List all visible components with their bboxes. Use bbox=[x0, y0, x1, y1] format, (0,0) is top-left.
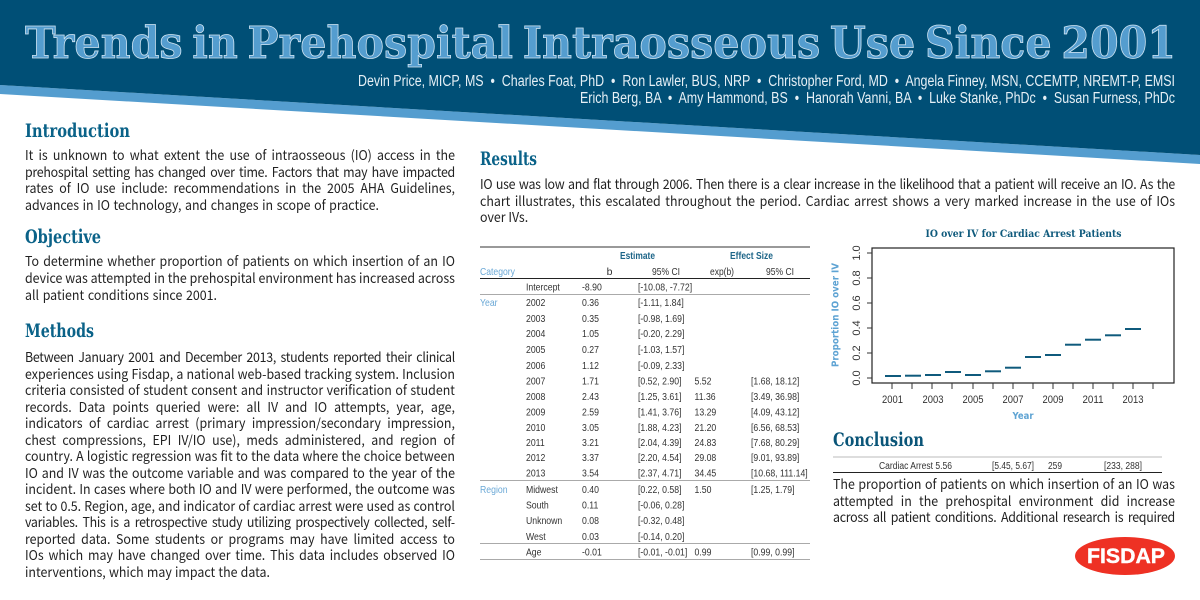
table effect size confidence intervals: [6.56, 68.53] bbox=[751, 422, 799, 434]
heading: results: Results bbox=[480, 148, 537, 170]
table estimate column: -0.01 bbox=[582, 547, 602, 559]
table effect size column: 29.08 bbox=[694, 452, 716, 464]
table estimate confidence intervals: [-0.98, 1.69] bbox=[638, 313, 684, 325]
table estimate confidence intervals: [-0.01, -0.01] bbox=[638, 547, 687, 559]
table row labels: 2012 bbox=[526, 452, 545, 464]
heading: introduction: Introduction bbox=[25, 120, 130, 142]
table estimate confidence intervals: [-0.14, 0.20] bbox=[638, 531, 684, 543]
table row labels: 2008 bbox=[526, 391, 545, 403]
table estimate confidence intervals: [-1.03, 1.57] bbox=[638, 344, 684, 356]
table category labels bbox=[480, 297, 508, 496]
table header: Category bbox=[480, 266, 516, 278]
table row labels: Age bbox=[526, 547, 541, 559]
table estimate column: 0.40 bbox=[582, 484, 599, 496]
table estimate confidence intervals: [1.25, 3.61] bbox=[638, 391, 682, 403]
text: results bbox=[480, 176, 1175, 225]
chart y axis labels bbox=[851, 245, 863, 386]
table estimate column: 3.37 bbox=[582, 452, 599, 464]
table estimate confidence intervals: [2.20, 4.54] bbox=[638, 452, 682, 464]
table row labels: 2002 bbox=[526, 297, 545, 309]
cardiac arrest table row: [233, 288] bbox=[1104, 461, 1142, 472]
table estimate column: 1.71 bbox=[582, 376, 599, 388]
chart x axis labels: 2005 bbox=[962, 394, 984, 406]
heading: conclusion: Conclusion bbox=[833, 429, 924, 451]
table effect size confidence intervals: [7.68, 80.29] bbox=[751, 437, 799, 449]
table effect size column: 0.99 bbox=[694, 547, 711, 559]
table effect size column: 11.36 bbox=[694, 391, 716, 403]
text: introduction bbox=[25, 147, 455, 213]
authors bbox=[358, 73, 1175, 107]
table effect size column bbox=[694, 376, 716, 559]
table row labels: 2003 bbox=[526, 313, 545, 325]
table category labels: Year bbox=[480, 297, 498, 309]
table row labels: 2007 bbox=[526, 376, 545, 388]
table row labels: West bbox=[526, 531, 546, 543]
table estimate column: 0.08 bbox=[582, 515, 599, 527]
table row labels: Midwest bbox=[526, 484, 558, 496]
header banner bbox=[0, 0, 1200, 164]
table effect size column: 34.45 bbox=[694, 468, 716, 480]
chart y axis labels: 0.6 bbox=[851, 295, 863, 311]
table estimate confidence intervals: [-0.09, 2.33] bbox=[638, 360, 684, 372]
table effect size confidence intervals: [1.25, 1.79] bbox=[751, 484, 795, 496]
cardiac arrest table row: Cardiac Arrest 5.56 bbox=[879, 461, 952, 472]
table estimate column: 0.27 bbox=[582, 344, 599, 356]
chart x axis labels: 2011 bbox=[1082, 394, 1104, 406]
table row labels: Unknown bbox=[526, 515, 562, 527]
table effect size confidence intervals bbox=[751, 376, 808, 559]
chart x axis labels bbox=[882, 394, 1144, 406]
table effect size confidence intervals: [9.01, 93.89] bbox=[751, 452, 799, 464]
table estimate column: 0.36 bbox=[582, 297, 599, 309]
logo: Fisdap: FISDAP bbox=[1087, 545, 1165, 568]
table header: 95% CI bbox=[766, 266, 794, 278]
chart y axis labels: 0.2 bbox=[851, 345, 863, 361]
table estimate confidence intervals: [0.22, 0.58] bbox=[638, 484, 682, 496]
table effect size confidence intervals: [3.49, 36.98] bbox=[751, 391, 799, 403]
chart x axis labels: 2009 bbox=[1042, 394, 1064, 406]
table effect size column: 1.50 bbox=[694, 484, 711, 496]
table estimate column: -8.90 bbox=[582, 282, 602, 294]
cardiac arrest table row: 259 bbox=[1048, 461, 1062, 472]
chart x axis labels: 2001 bbox=[882, 394, 903, 406]
chart y axis labels: 1.0 bbox=[851, 245, 863, 261]
table estimate column: 0.35 bbox=[582, 313, 599, 325]
table estimate confidence intervals: [2.37, 4.71] bbox=[638, 468, 682, 480]
table row labels: 2013 bbox=[526, 468, 545, 480]
table header: Estimate bbox=[620, 250, 655, 262]
chart y axis labels: 0.8 bbox=[851, 270, 863, 286]
table estimate column: 1.12 bbox=[582, 360, 599, 372]
cardiac arrest table row: [5.45, 5.67] bbox=[992, 461, 1034, 472]
table effect size confidence intervals: [4.09, 43.12] bbox=[751, 407, 799, 419]
table row labels: 2010 bbox=[526, 422, 545, 434]
chart x axis labels: 2013 bbox=[1122, 394, 1144, 406]
heading: methods: Methods bbox=[25, 320, 94, 342]
table effect size confidence intervals: [10.68, 111.14] bbox=[751, 468, 808, 480]
table row labels: 2011 bbox=[526, 437, 545, 449]
table effect size column: 21.20 bbox=[694, 422, 716, 434]
table estimate column: 2.59 bbox=[582, 407, 599, 419]
table estimate confidence intervals: [-0.20, 2.29] bbox=[638, 328, 684, 340]
table header: Effect Size bbox=[730, 250, 773, 262]
chart y axis title: Proportion IO over IV bbox=[830, 262, 842, 367]
table row labels: Intercept bbox=[526, 282, 560, 294]
cardiac arrest table row bbox=[833, 457, 1162, 472]
table effect size confidence intervals: [1.68, 18.12] bbox=[751, 376, 799, 388]
chart x axis title: Year bbox=[1012, 411, 1034, 422]
heading: objective: Objective bbox=[25, 226, 101, 248]
table header: exp(b) bbox=[710, 266, 734, 278]
table row labels bbox=[526, 282, 562, 559]
table estimate column: 2.43 bbox=[582, 391, 599, 403]
table row labels: 2006 bbox=[526, 360, 545, 372]
chart title: IO over IV for Cardiac Arrest Patients bbox=[926, 228, 1122, 240]
chart y axis labels: 0.4 bbox=[851, 320, 863, 336]
table estimate column: 3.21 bbox=[582, 437, 599, 449]
table estimate confidence intervals: [1.88, 4.23] bbox=[638, 422, 682, 434]
logo: Fisdap bbox=[1075, 537, 1175, 575]
table estimate column: 3.05 bbox=[582, 422, 599, 434]
regression table bbox=[480, 247, 810, 560]
table header: 95% CI bbox=[652, 266, 680, 278]
text: conclusion bbox=[833, 476, 1175, 525]
table row labels: South bbox=[526, 500, 549, 512]
table estimate column: 1.05 bbox=[582, 328, 599, 340]
table header: b bbox=[607, 266, 613, 278]
chart y axis labels: 0.0 bbox=[851, 370, 863, 386]
table estimate column: 3.54 bbox=[582, 468, 600, 480]
table estimate confidence intervals: [-0.06, 0.28] bbox=[638, 500, 684, 512]
chart x axis labels: 2007 bbox=[1002, 394, 1024, 406]
line chart: IO over IV by year bbox=[830, 245, 1174, 422]
table estimate confidence intervals: [0.52, 2.90] bbox=[638, 376, 682, 388]
table row labels: 2004 bbox=[526, 328, 546, 340]
table estimate confidence intervals: [1.41, 3.76] bbox=[638, 407, 682, 419]
table effect size confidence intervals: [0.99, 0.99] bbox=[751, 547, 795, 559]
table effect size column: 13.29 bbox=[694, 407, 716, 419]
table row labels: 2009 bbox=[526, 407, 545, 419]
table row labels: 2005 bbox=[526, 344, 545, 356]
table estimate column bbox=[582, 282, 602, 559]
chart x axis labels: 2003 bbox=[922, 394, 944, 406]
table estimate confidence intervals: [-0.32, 0.48] bbox=[638, 515, 684, 527]
table estimate confidence intervals: [-10.08, -7.72] bbox=[638, 282, 692, 294]
text: methods bbox=[25, 349, 455, 580]
table effect size column: 24.83 bbox=[694, 437, 716, 449]
table estimate confidence intervals: [2.04, 4.39] bbox=[638, 437, 682, 449]
table estimate confidence intervals: [-1.11, 1.84] bbox=[638, 297, 684, 309]
table estimate confidence intervals bbox=[638, 282, 692, 559]
table category labels: Region bbox=[480, 484, 508, 496]
table estimate column: 0.11 bbox=[582, 500, 598, 512]
table estimate column: 0.03 bbox=[582, 531, 599, 543]
table header bbox=[480, 250, 794, 278]
text: objective bbox=[25, 253, 455, 303]
chart data segments bbox=[885, 329, 1141, 376]
table effect size column: 5.52 bbox=[694, 376, 711, 388]
